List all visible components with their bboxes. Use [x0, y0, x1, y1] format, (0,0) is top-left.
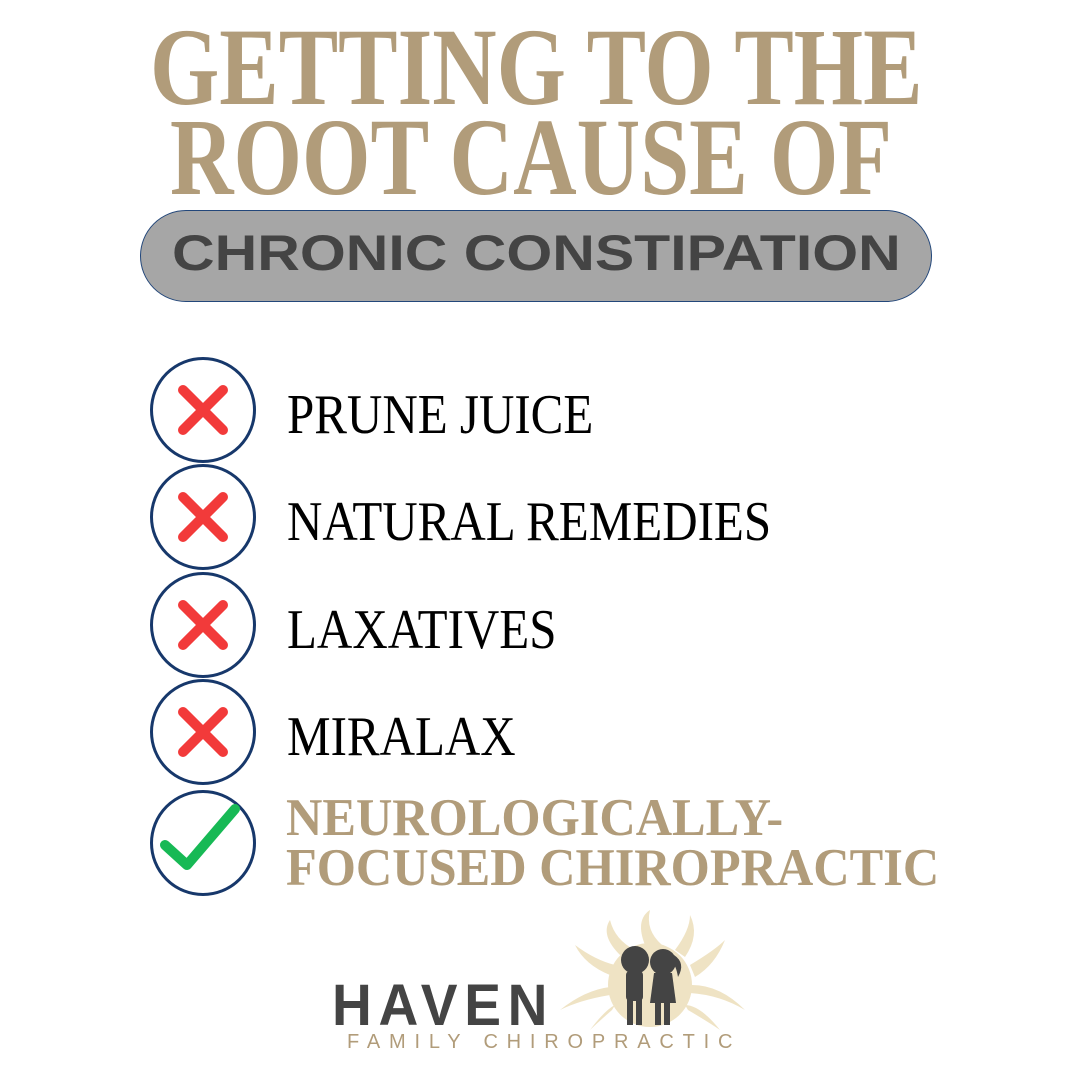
- title line 2: ROOT CAUSE OF: [170, 96, 892, 218]
- title: [150, 6, 923, 218]
- item: neurologically-focused chiropractic: [150, 789, 939, 897]
- brand name: HAVEN: [332, 973, 554, 1038]
- item: prune juice: [150, 357, 593, 463]
- icon: red x: [150, 572, 256, 678]
- item: laxatives: [150, 572, 556, 678]
- text: PRUNE JUICE: [287, 384, 593, 446]
- icon: red x: [150, 679, 256, 785]
- icon: sun with kids: [560, 910, 745, 1030]
- banner text: CHRONIC CONSTIPATION: [172, 225, 901, 281]
- text: MIRALAX: [287, 706, 516, 768]
- title line 1: GETTING TO THE: [150, 6, 923, 128]
- text: NEUROLOGICALLY-: [286, 789, 783, 847]
- text: LAXATIVES: [287, 599, 556, 661]
- list: [150, 357, 939, 897]
- text: FOCUSED CHIROPRACTIC: [286, 839, 939, 897]
- icon: green check: [150, 790, 256, 896]
- logo: [332, 910, 745, 1053]
- icon: red x: [150, 464, 256, 570]
- icon: red x: [150, 357, 256, 463]
- tagline: FAMILY CHIROPRACTIC: [347, 1031, 741, 1053]
- item: natural remedies: [150, 464, 771, 570]
- item: miralax: [150, 679, 516, 785]
- pill banner: [140, 210, 932, 302]
- text: NATURAL REMEDIES: [287, 491, 771, 553]
- text: [286, 789, 939, 897]
